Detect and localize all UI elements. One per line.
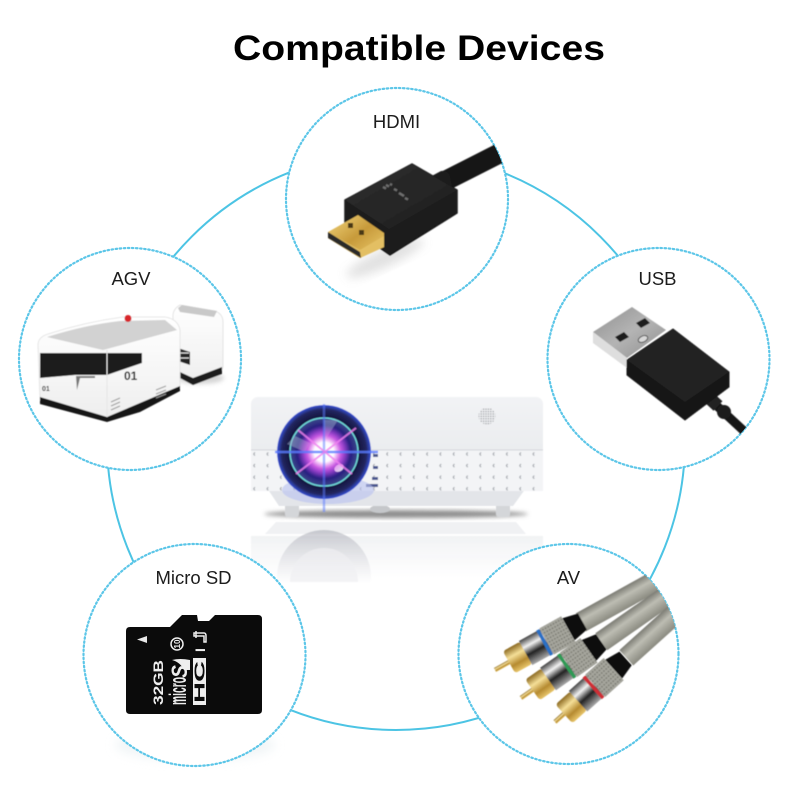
red plug xyxy=(553,607,676,724)
label: AV xyxy=(557,567,581,588)
feet xyxy=(285,503,510,517)
projector reflection xyxy=(251,522,543,582)
connecting ring xyxy=(107,152,685,730)
circle shadow xyxy=(115,729,275,761)
icon: microSD card: HC xyxy=(192,661,208,703)
icon: HDMI connector xyxy=(328,147,512,284)
dark vents xyxy=(366,454,378,487)
title: Compatible Devices xyxy=(233,29,605,68)
icon: USB plug xyxy=(593,307,745,432)
icon: microSD card xyxy=(126,615,262,714)
icon: AGV robots: 01 xyxy=(42,386,50,393)
panel: USB xyxy=(548,248,770,470)
label: HDMI xyxy=(373,111,420,132)
icon: microSD card: 10 xyxy=(173,639,182,648)
icon: microSD card: 32GB xyxy=(150,660,166,705)
panel: AV xyxy=(457,542,680,766)
projector body xyxy=(251,397,543,491)
icon: microSD card: S xyxy=(167,665,192,678)
circle xyxy=(458,544,678,764)
projector xyxy=(251,397,543,582)
speaker grille xyxy=(478,408,496,424)
circle xyxy=(286,88,508,310)
panel: Micro SD xyxy=(84,544,306,766)
circle xyxy=(548,248,770,470)
blue plug xyxy=(493,574,658,673)
panel: AGV xyxy=(19,248,241,470)
base xyxy=(267,488,526,506)
floor shadow xyxy=(264,510,528,518)
circle xyxy=(19,248,241,470)
label: Micro SD xyxy=(155,567,232,588)
icon: AGV robots: 01 xyxy=(124,369,138,383)
circle xyxy=(84,544,306,766)
icon: AGV robots xyxy=(38,305,224,422)
icon: microSD card: micro xyxy=(165,677,192,705)
green plug xyxy=(519,590,668,700)
label: AGV xyxy=(111,268,151,289)
lens xyxy=(275,404,378,512)
icon: RCA cables xyxy=(493,574,676,724)
panel: HDMI xyxy=(286,88,512,310)
label: USB xyxy=(638,268,677,289)
icon: microSD card: I xyxy=(192,648,208,652)
